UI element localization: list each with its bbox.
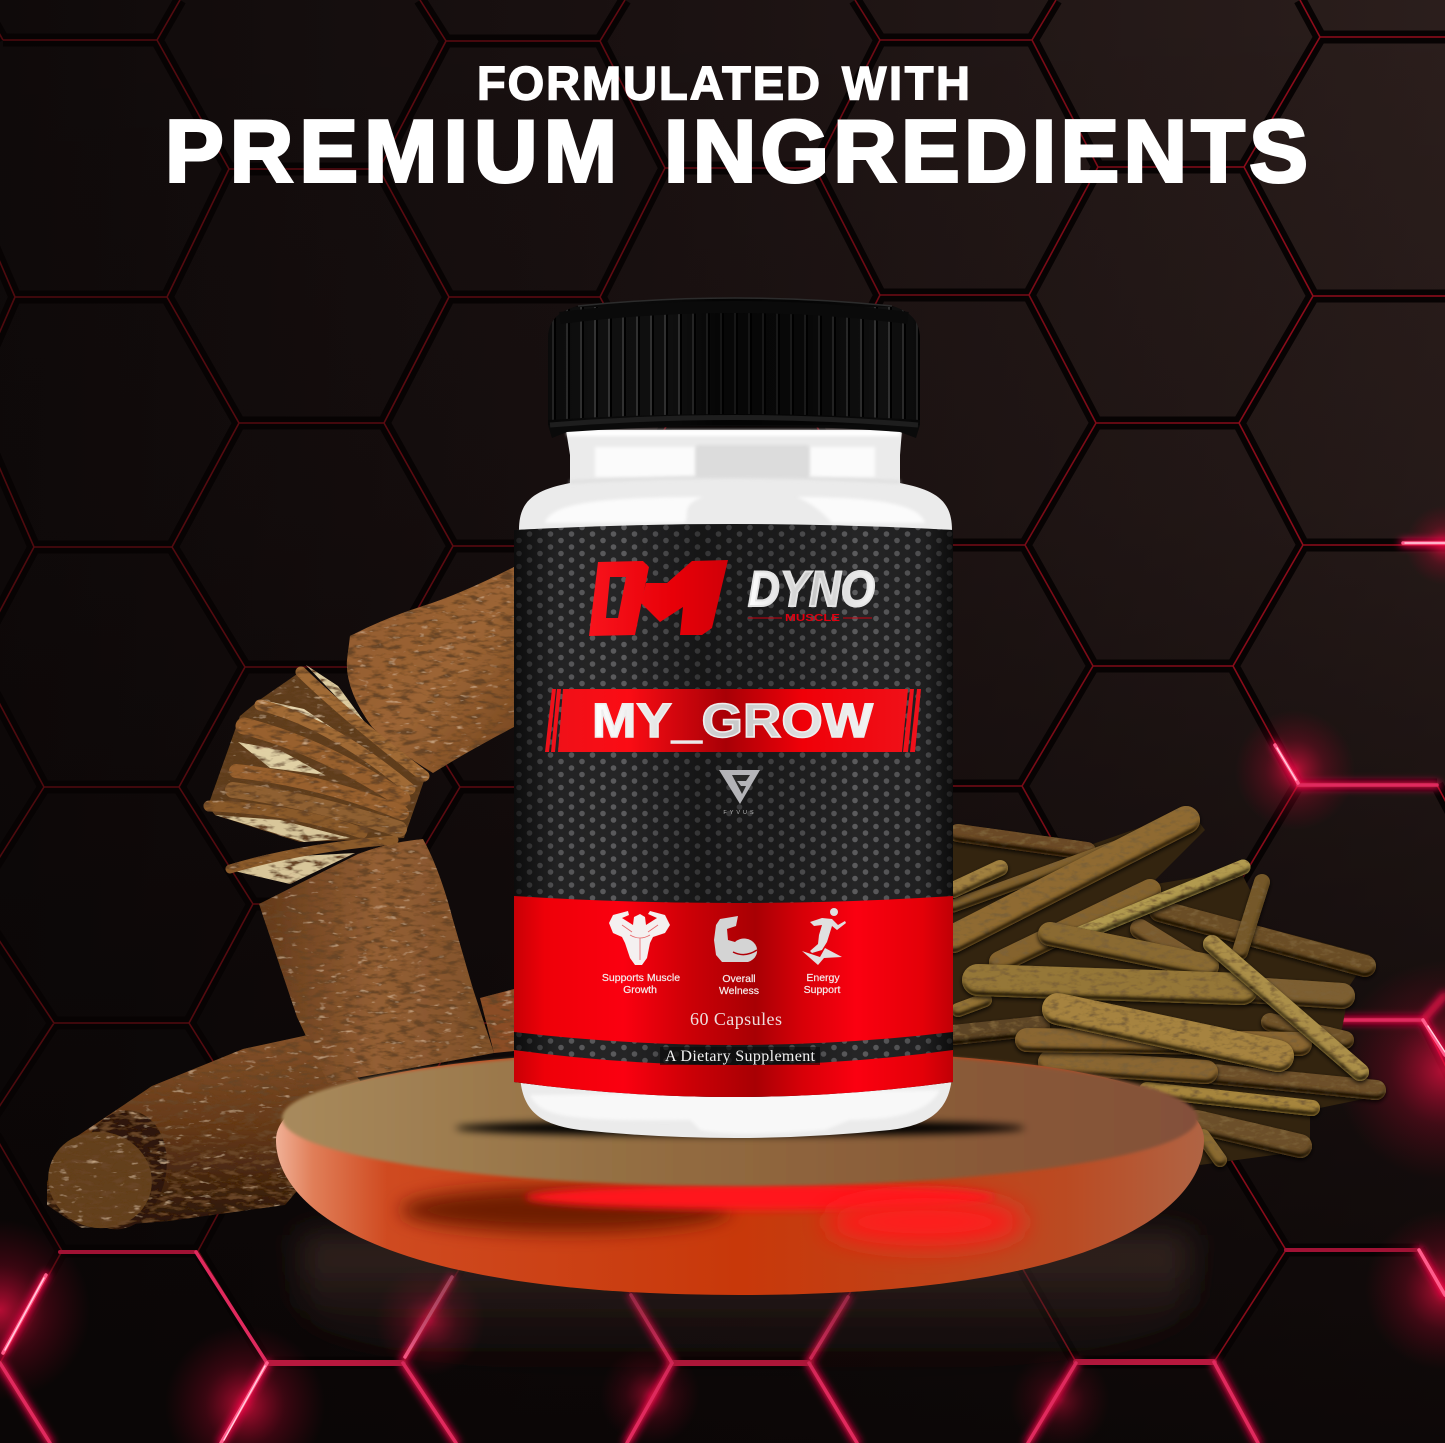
root: log end cap: [39, 1102, 178, 1238]
maker logo: FYVUS: [723, 810, 757, 816]
product name banner: MY_GROW: [592, 695, 874, 748]
supplement bottle: [514, 295, 953, 1138]
label black strip behind text: [660, 1047, 820, 1065]
heading line 1: WITH: [842, 56, 970, 110]
bottle highlights: [530, 430, 940, 1134]
heading line 2: INGREDIENTS: [664, 102, 1308, 200]
icon: flexed arm: [714, 916, 757, 962]
icon: runner: [802, 908, 846, 965]
bottle shadow: [455, 1120, 1025, 1136]
maker logo: [719, 770, 760, 816]
podium top: [282, 1050, 1198, 1186]
root: lower log: [47, 1035, 360, 1228]
label red band: [514, 896, 953, 1045]
capsule count: 60 Capsules: [690, 1009, 782, 1029]
podium side: [276, 1050, 1204, 1295]
root: trunk: [259, 839, 494, 1083]
podium: [276, 1050, 1204, 1295]
benefit labels: [602, 972, 840, 997]
root: upper chunk: [347, 567, 514, 773]
root: back piece: [480, 989, 514, 1053]
neon hexagon edges: [0, 543, 1445, 1443]
supplement label: A Dietary Supplement: [665, 1048, 816, 1065]
podium glow: [400, 1184, 1025, 1246]
label dotted background: [514, 524, 953, 1097]
neon glows: [0, 505, 1445, 1443]
heading: [165, 56, 1308, 200]
heading line 2: [165, 102, 1308, 200]
benefit labels: Supports Muscle: [602, 972, 680, 984]
stick pile base: [953, 810, 1383, 1165]
ingredient: ashwagandha root sticks: [953, 810, 1383, 1165]
heading line 2: PREMIUM: [165, 102, 617, 200]
benefit labels: Support: [804, 984, 840, 996]
benefit labels: Welness: [719, 985, 759, 997]
ingredient: tall root chunks: [39, 567, 514, 1238]
root: slices: [208, 665, 425, 884]
bottle cap: [548, 295, 920, 438]
heading line 1: [477, 56, 970, 110]
product name banner: [545, 689, 921, 752]
brand logo DM: [589, 560, 728, 636]
heading line 1: FORMULATED: [477, 56, 820, 110]
benefit labels: Energy: [806, 972, 840, 984]
benefit labels: Growth: [623, 984, 657, 996]
brand name: DYNO: [748, 561, 875, 617]
brand name: MUSCLE: [785, 613, 840, 624]
label lower red band: [514, 1050, 953, 1097]
bottle body white: [519, 430, 952, 1138]
platform reflection: [300, 1235, 1190, 1380]
benefit labels: Overall: [722, 973, 756, 985]
icon: muscle man: [609, 911, 670, 965]
bottle label: [514, 524, 953, 1097]
